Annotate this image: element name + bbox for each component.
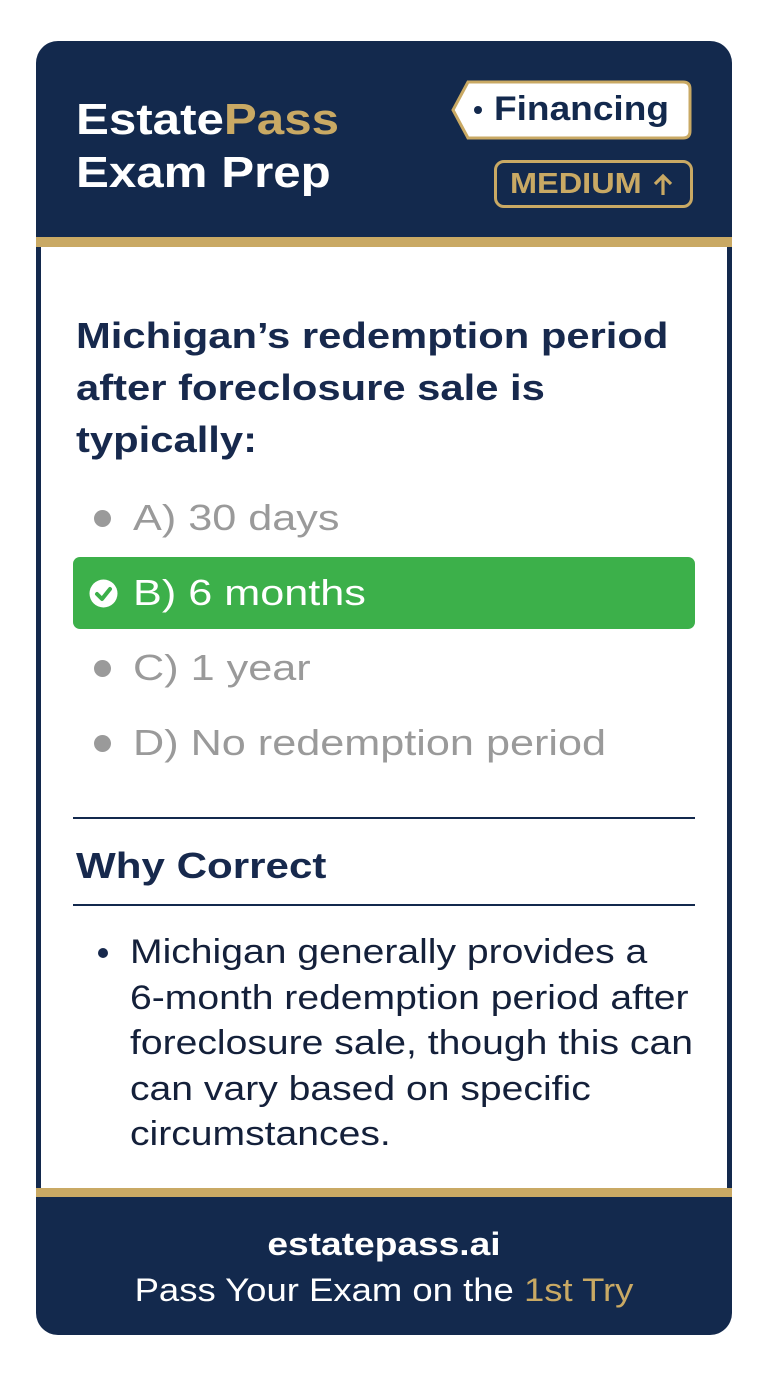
header: brand title (76, 95, 339, 197)
option D: D) No redemption period (133, 722, 606, 763)
option A: A) 30 days (133, 497, 340, 538)
footer text: Pass Your Exam on the 1st Try (135, 1272, 633, 1308)
explanation: 6-month redemption period after (130, 978, 689, 1016)
tag: Financing (451, 80, 692, 140)
explanation: foreclosure sale, though this can (130, 1024, 693, 1062)
badge: MEDIUM: MEDIUM (510, 168, 642, 200)
header: brand title: EstatePass (76, 95, 339, 144)
badge: MEDIUM (494, 160, 693, 208)
footer text: estatepass.ai (267, 1226, 501, 1262)
option C: C) 1 year (133, 647, 311, 688)
question: typically: (76, 419, 257, 460)
option B correct (73, 557, 695, 629)
explanation: Michigan generally provides a (130, 933, 647, 971)
heading: Why Correct: Why Correct (76, 845, 326, 886)
explanation: circumstances. (130, 1115, 391, 1153)
option B correct: B) 6 months (133, 572, 366, 613)
question: after foreclosure sale is (76, 367, 545, 408)
question: Michigan’s redemption period (76, 315, 668, 356)
header: brand title: Exam Prep (76, 148, 331, 197)
tag: Financing: Financing (494, 90, 669, 128)
question (76, 315, 668, 460)
explanation (98, 933, 693, 1153)
explanation: can vary based on specific (130, 1070, 591, 1108)
footer text (135, 1226, 634, 1308)
